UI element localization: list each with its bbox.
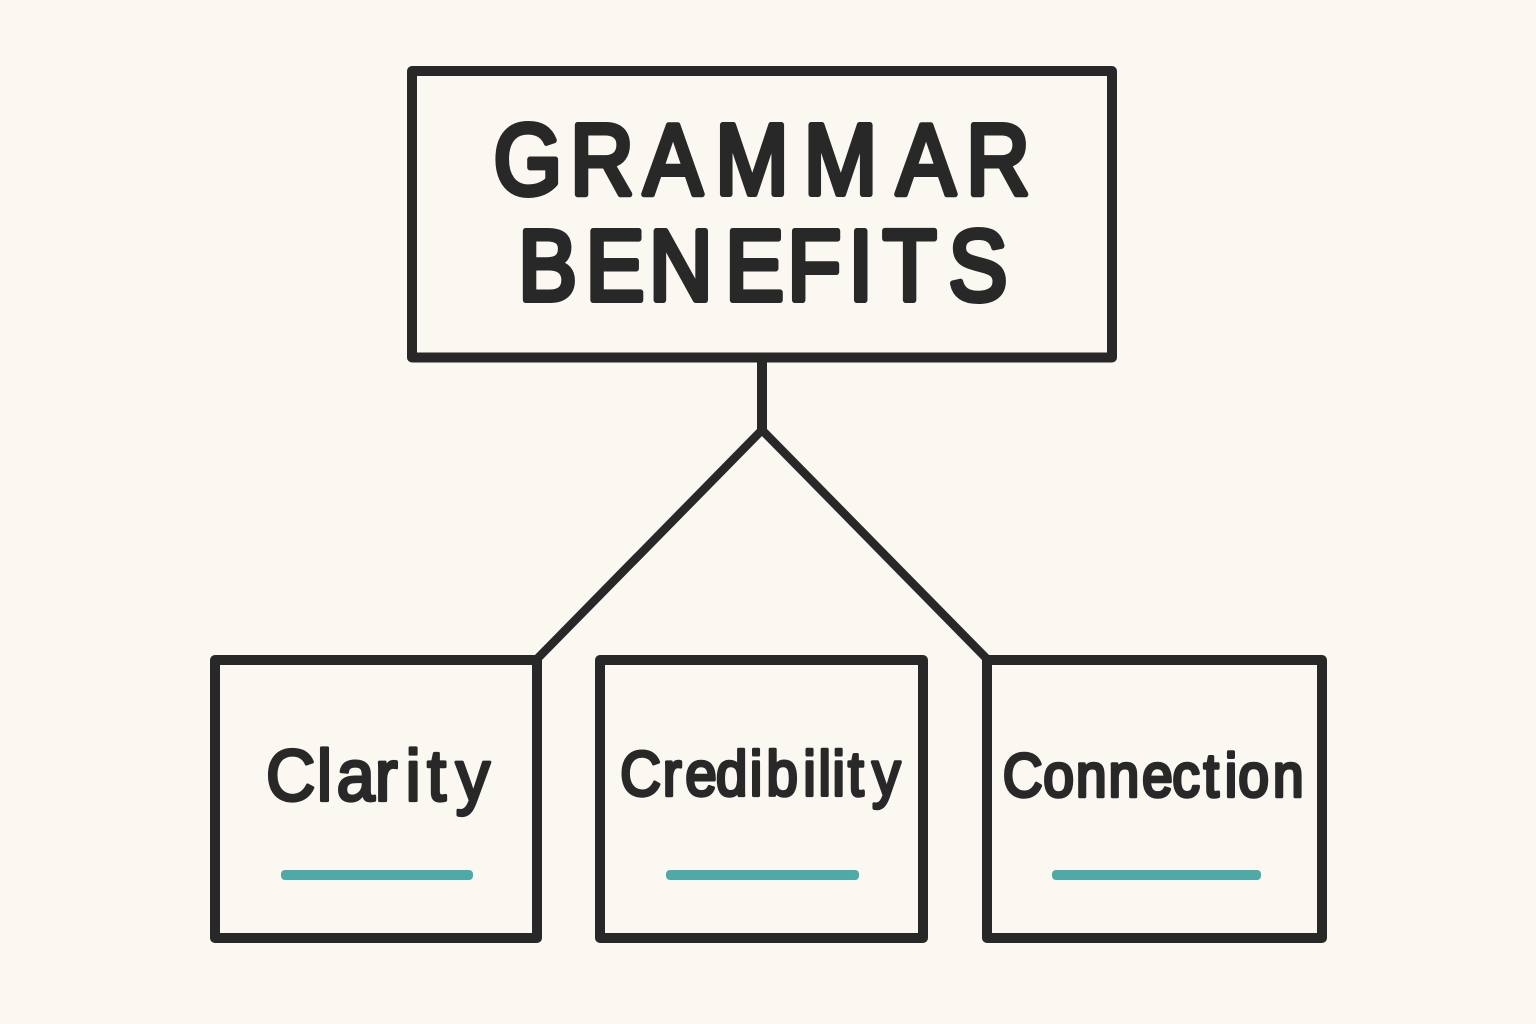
label: Clarity: Clarity — [266, 735, 490, 816]
panel: Connection — [987, 660, 1322, 938]
accent line: Credibility — [666, 870, 859, 880]
label: Connection: Connection — [1003, 742, 1303, 810]
label: Credibility: Credibility — [620, 739, 900, 809]
accent line: Connection — [1052, 870, 1261, 880]
panel: Clarity — [215, 660, 537, 938]
title box — [412, 71, 1112, 358]
title: Grammar: GRAMMAR — [494, 104, 1030, 215]
panel: Credibility — [600, 660, 923, 938]
connector lines — [537, 360, 987, 659]
title: Benefits: BENEFITS — [518, 210, 1007, 321]
accent line: Clarity — [281, 870, 473, 880]
